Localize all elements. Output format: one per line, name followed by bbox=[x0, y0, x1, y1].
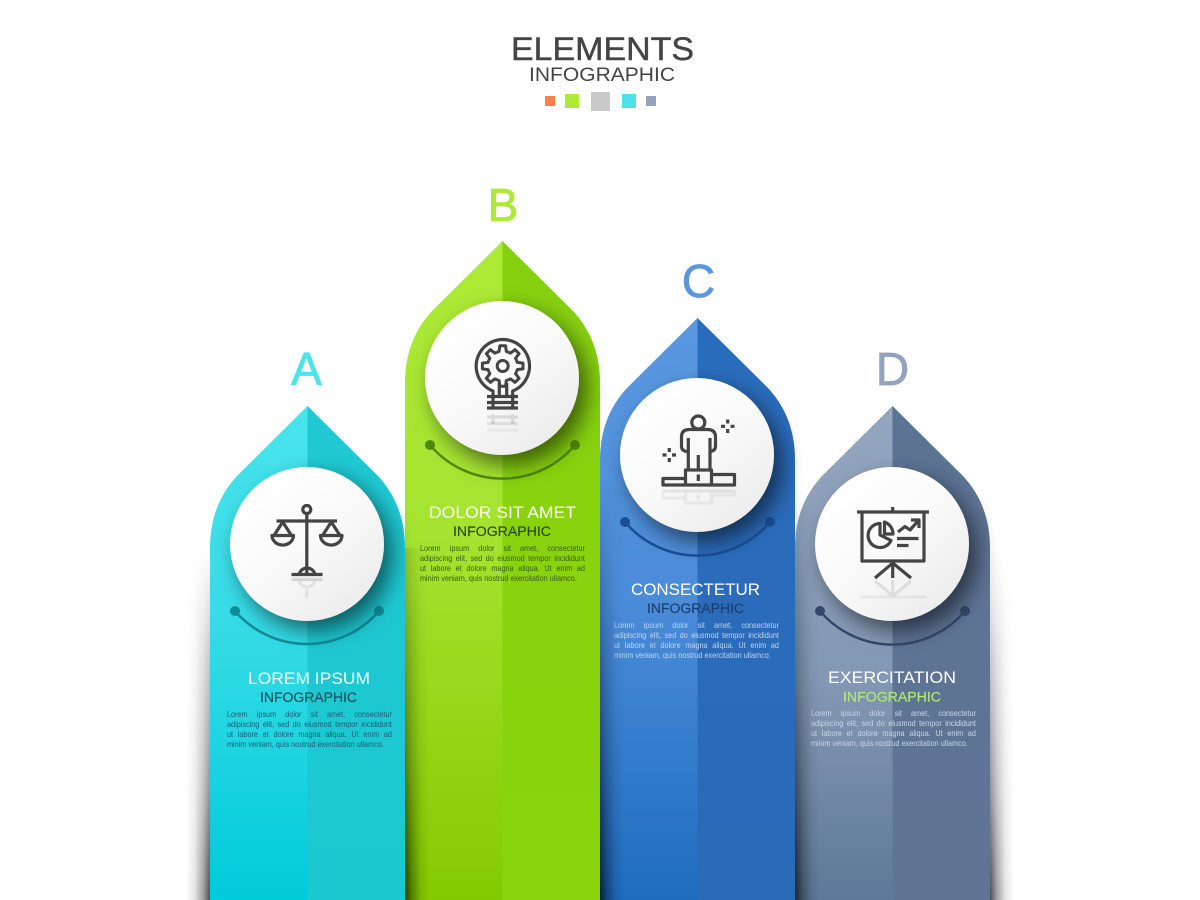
white disc B bbox=[425, 301, 579, 455]
text C: INFOGRAPHIC bbox=[647, 601, 744, 616]
icon: person on podium bbox=[662, 416, 734, 503]
arc connector A bbox=[230, 606, 384, 644]
title: ELEMENTS bbox=[511, 31, 694, 67]
text C: ut labore et dolore magna aliqua. Ut enim ad bbox=[614, 640, 779, 650]
letter A: A bbox=[291, 343, 322, 395]
letter D: D bbox=[876, 343, 909, 395]
title bbox=[511, 31, 694, 86]
colour squares bbox=[545, 92, 656, 111]
white disc D bbox=[815, 467, 969, 621]
text A: INFOGRAPHIC bbox=[260, 690, 357, 705]
letter C: C bbox=[682, 255, 715, 307]
text B bbox=[420, 503, 600, 586]
arc connector B bbox=[425, 440, 580, 479]
text C: minim veniam, quis nostrud exercitation ullamco. bbox=[614, 650, 771, 660]
panel: C consectetur bbox=[600, 255, 819, 900]
arc connector C bbox=[620, 517, 775, 556]
text C: adipiscing elit, sed do eiusmod tempor incididunt bbox=[614, 630, 779, 640]
arc connector D bbox=[815, 606, 970, 645]
panel: D exercitation bbox=[795, 343, 1014, 900]
text B: ut labore et dolore magna aliqua. Ut enim ad bbox=[420, 563, 585, 573]
text D: INFOGRAPHIC bbox=[843, 690, 941, 704]
icon: light bulb with gear bbox=[476, 339, 530, 430]
text A: minim veniam, quis nostrud exercitation ullamco. bbox=[227, 739, 384, 749]
white disc A bbox=[230, 467, 384, 621]
text A: ut labore et dolore magna aliqua. Ut enim ad bbox=[227, 729, 392, 739]
text B: INFOGRAPHIC bbox=[453, 524, 551, 539]
panel: A lorem ipsum bbox=[186, 343, 429, 900]
text B: minim veniam, quis nostrud exercitation ullamco. bbox=[420, 573, 577, 583]
text B: DOLOR SIT AMET bbox=[429, 503, 576, 522]
panel: B dolor sit amet bbox=[405, 179, 624, 900]
text A bbox=[227, 669, 407, 752]
text B: adipiscing elit, sed do eiusmod tempor incididunt bbox=[420, 553, 585, 563]
text D: EXERCITATION bbox=[828, 668, 956, 687]
text D: adipiscing elit, sed do eiusmod tempor incididunt bbox=[811, 718, 976, 728]
text D: ut labore et dolore magna aliqua. Ut enim ad bbox=[811, 728, 976, 738]
white disc C bbox=[620, 378, 774, 532]
icon: presentation board bbox=[857, 507, 929, 597]
title: INFOGRAPHIC bbox=[529, 65, 675, 86]
text A: adipiscing elit, sed do eiusmod tempor incididunt bbox=[227, 719, 392, 729]
text C bbox=[614, 580, 794, 663]
text D bbox=[811, 668, 991, 751]
text C: CONSECTETUR bbox=[631, 580, 760, 599]
icon: balance scales bbox=[272, 506, 342, 598]
text A: LOREM IPSUM bbox=[248, 669, 370, 688]
letter B: B bbox=[488, 179, 518, 231]
text D: minim veniam, quis nostrud exercitation ullamco. bbox=[811, 738, 968, 748]
